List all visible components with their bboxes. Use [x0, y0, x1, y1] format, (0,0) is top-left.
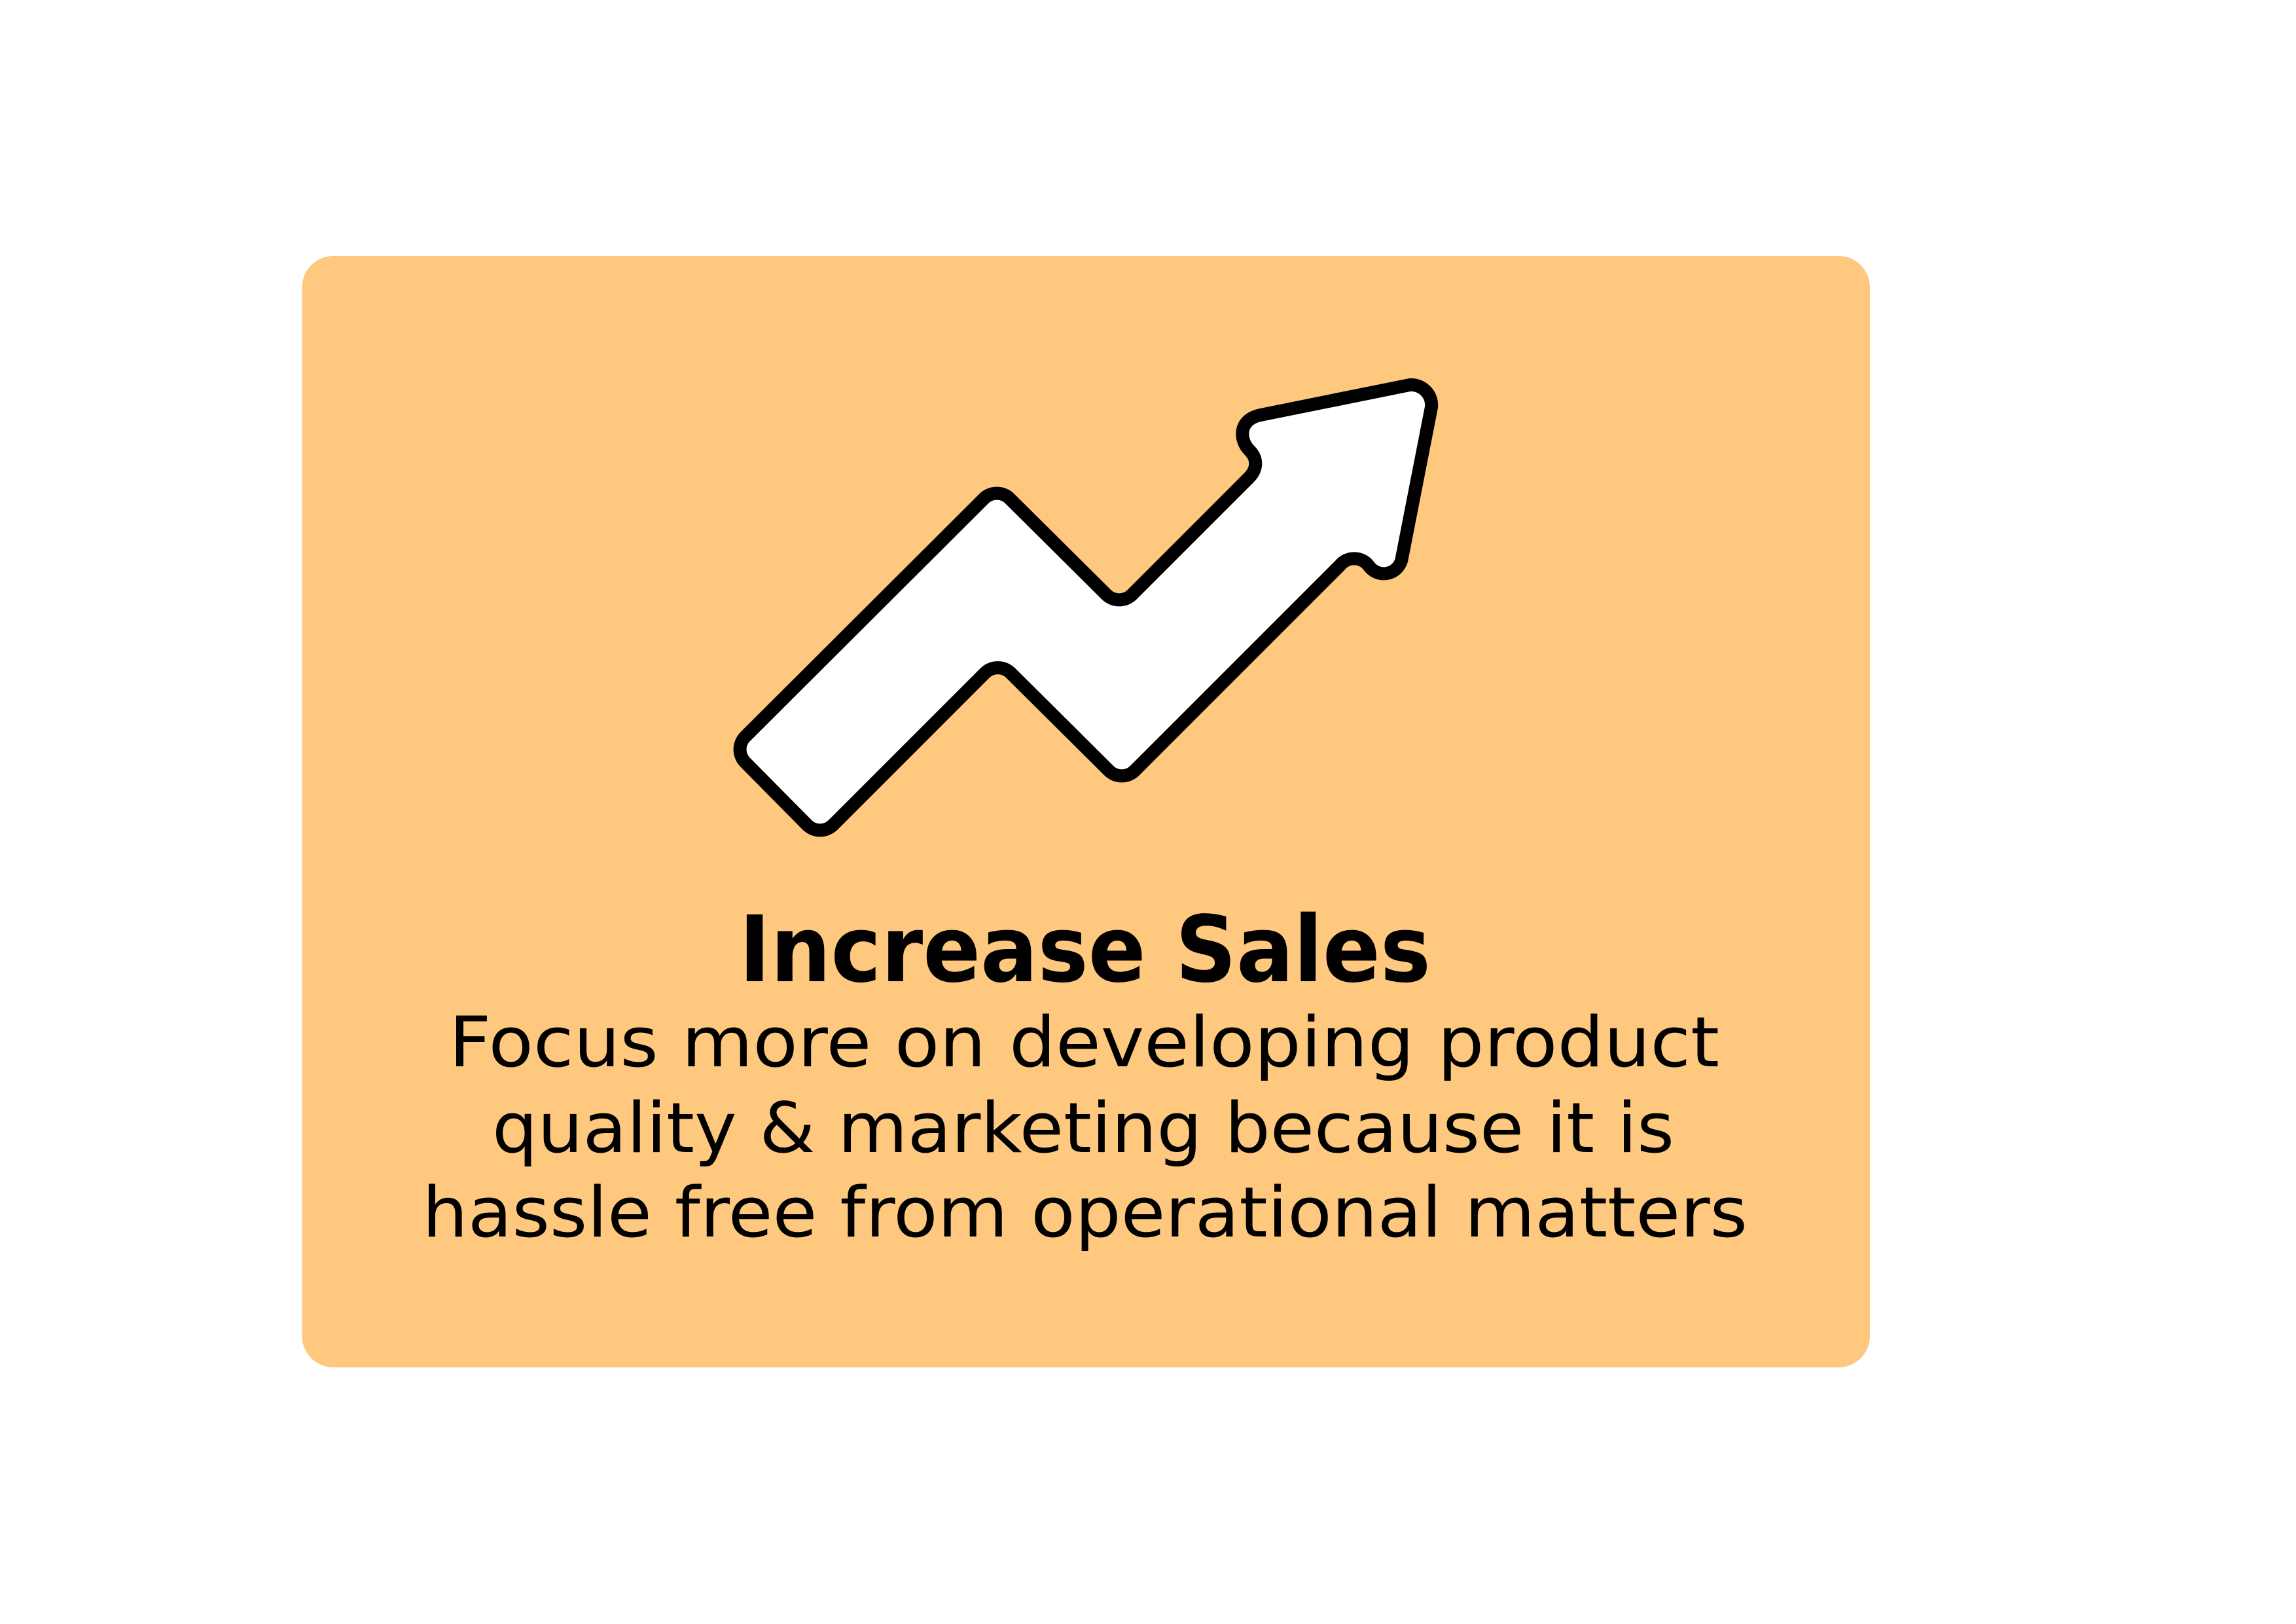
panel background: [302, 256, 1870, 1367]
icon: rising zigzag arrow: [740, 385, 1431, 830]
description line 2: quality & marketing because it is: [492, 1088, 1674, 1168]
text block: description: [422, 1002, 1748, 1253]
panel: increase sales card: [302, 256, 1870, 1367]
description line 1: Focus more on developing product: [449, 1002, 1719, 1083]
heading: Increase Sales: [739, 897, 1431, 1003]
description line 3: hassle free from operational matters: [422, 1172, 1748, 1253]
